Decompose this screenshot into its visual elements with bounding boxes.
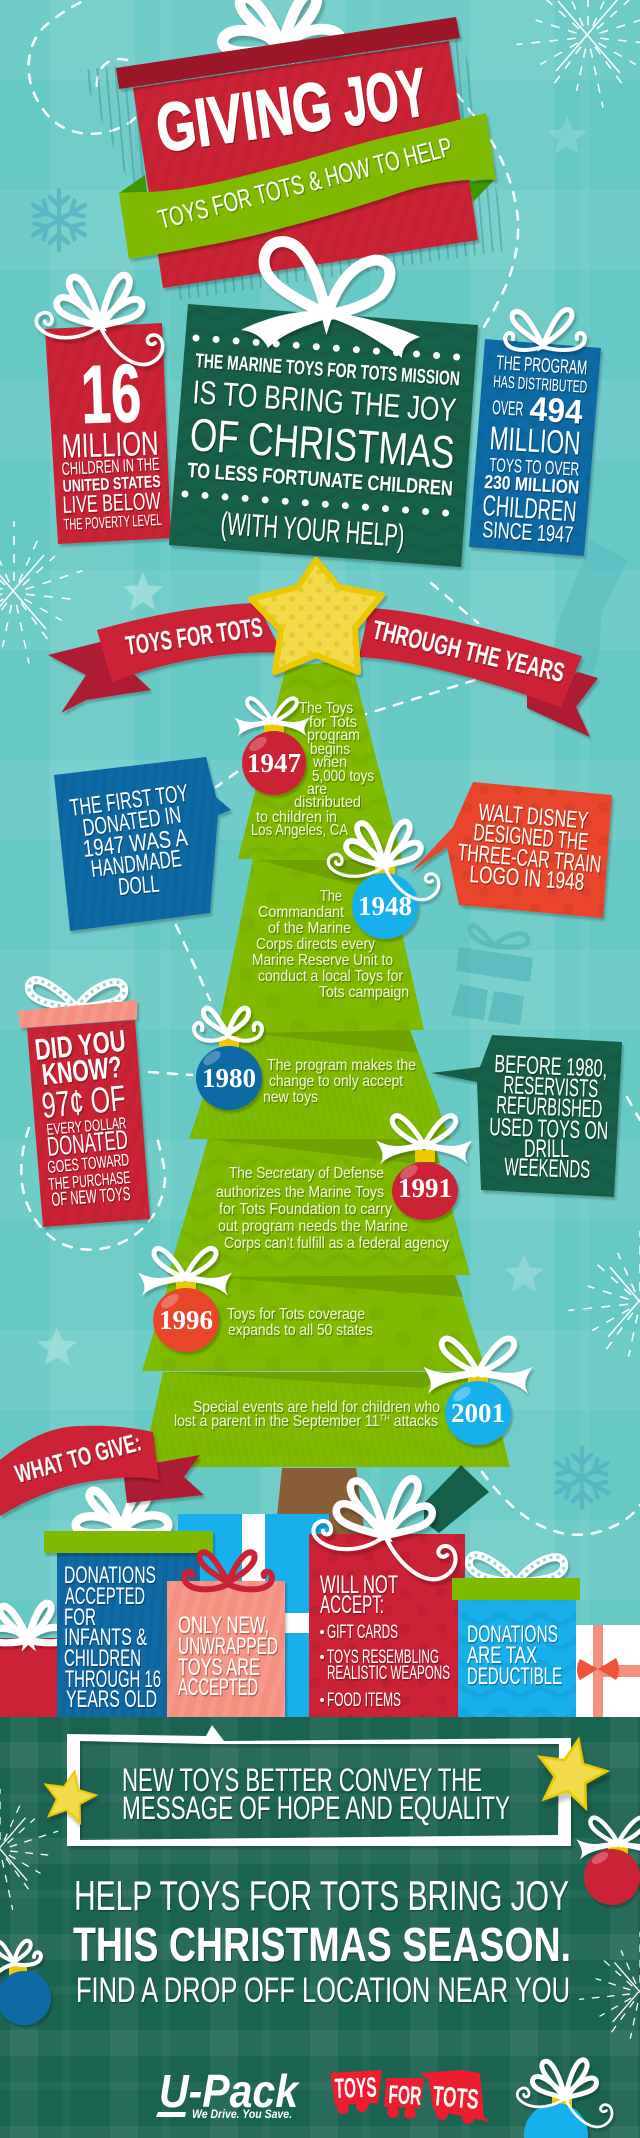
gift: only new unwrapped [167, 1552, 285, 1717]
banner: what to give [0, 1426, 204, 1516]
christmas tree [142, 660, 510, 1535]
curled bow [36, 275, 163, 365]
faint background decorations [0, 0, 640, 1508]
text 1996: expands to all 50 states [228, 1322, 373, 1339]
disney text: LOGO IN 1948 [469, 861, 585, 896]
red tag body [45, 323, 171, 544]
train text [334, 2072, 480, 2115]
text 1991: out program needs the Marine [218, 1218, 408, 1235]
train cars [330, 2070, 490, 2124]
icon: faint gift [451, 926, 533, 1025]
distribution text: CHILDREN [482, 490, 578, 529]
text 1948: conduct a local Toys for [258, 968, 404, 985]
gift: only new unwrapped: ACCEPTED [178, 1674, 258, 1701]
gift lid [116, 17, 460, 89]
year 2001: 2001 [451, 1398, 505, 1428]
icon: gift tag [424, 1465, 489, 1533]
gift: donations accepted: THROUGH 16 [65, 1666, 161, 1693]
text 1991: Corps can't fulfill as a federal agency [224, 1235, 449, 1252]
text 1947: distributed [294, 794, 361, 811]
text 1948: Corps directs every [256, 936, 375, 953]
text 1991: The Secretary of Defense [229, 1165, 384, 1182]
hatched shadow behind title gift [80, 33, 510, 300]
callout: walt disney [410, 782, 612, 918]
green speech panel [431, 1035, 622, 1197]
footer ornament red [576, 1818, 640, 1905]
far left bow [0, 1603, 68, 1643]
timeline 2001 [174, 1338, 533, 1445]
mission body [169, 304, 478, 567]
text 1948: Marine Reserve Unit to [252, 952, 393, 969]
panel: poverty stat red gift [36, 275, 171, 544]
text 1947: are [307, 781, 327, 798]
did you know text: KNOW? [40, 1051, 123, 1092]
text 1947 [251, 700, 374, 839]
distribution text: 494 [528, 390, 584, 432]
text 1948: Commandant [258, 904, 344, 921]
gift: will not accept: GIFT CARDS [327, 1622, 398, 1643]
right banner [359, 608, 582, 707]
text 1947: when [312, 754, 347, 771]
gift: will not accept: REALISTIC WEAPONS [327, 1663, 450, 1684]
text 1947: Los Angeles, CA [251, 822, 348, 839]
reservists text [489, 1050, 609, 1184]
tier 6 [142, 1372, 510, 1467]
footer ornament light blue [517, 2060, 612, 2138]
text 1947: for Tots [309, 714, 357, 731]
ornament 1980 [194, 1008, 262, 1110]
ornament 1947 [235, 698, 309, 795]
distribution text: MILLION [489, 419, 582, 462]
gift pile [0, 1479, 640, 1717]
gift: will not accept: FOOD ITEMS [327, 1690, 401, 1711]
did you know text: GOES TOWARD [47, 1150, 130, 1177]
gift: tax deductible [452, 1555, 580, 1717]
reservists text: DRILL [524, 1135, 569, 1163]
distribution text: SINCE 1947 [482, 516, 574, 548]
callout: reservists [431, 1035, 622, 1197]
gift outlined bow [29, 980, 124, 1008]
did you know text: THE PURCHASE [48, 1168, 131, 1194]
far left red gift [0, 1638, 57, 1717]
did you know text: DONATED [46, 1124, 129, 1162]
icon: right star [531, 1733, 612, 1811]
icon: tree top star [251, 560, 382, 672]
left banner [97, 603, 282, 682]
text 1948: of the Marine [268, 920, 351, 937]
text 1947: 5,000 toys [312, 768, 374, 785]
train text: TOTS [431, 2080, 480, 2115]
text 1947: The Toys [299, 700, 353, 717]
panel: toys distributed blue gift [469, 310, 601, 556]
callout: first toy [54, 757, 231, 931]
text 1996: Toys for Tots coverage [227, 1306, 365, 1323]
ornament 2001 [423, 1338, 533, 1445]
text 1947: begins [310, 741, 350, 758]
text 1980: change to only accept [269, 1073, 403, 1090]
stat caption: CHILDREN IN THE [61, 454, 160, 479]
U-Pack wordmark: U-Pack [159, 2065, 300, 2117]
mission text: IS TO BRING THE JOY [192, 373, 457, 428]
gift: donations accepted: YEARS OLD [66, 1686, 157, 1713]
gift: will not accept: ACCEPT: [320, 1591, 384, 1619]
white frame [67, 1725, 571, 1846]
train text: FOR [388, 2079, 422, 2111]
ornament 1948 [328, 821, 439, 939]
right tail [527, 672, 598, 737]
text 2001: TH [379, 1413, 390, 1423]
text 1948 [252, 888, 409, 1001]
timeline 1947 [235, 698, 374, 839]
first toy text: THE FIRST TOY [68, 780, 190, 822]
tier 3 [189, 1030, 450, 1139]
text 1991 [216, 1165, 449, 1252]
footer call to action [73, 1872, 571, 2010]
first toy text: HANDMADE [89, 845, 183, 883]
dotted row bottom [185, 494, 446, 513]
icon: left star [39, 1766, 100, 1825]
ornament 1996 [138, 1248, 232, 1352]
gift body red [27, 1020, 150, 1227]
text 1980 [263, 1057, 416, 1106]
mission text: THE MARINE TOYS FOR TOTS MISSION [195, 350, 461, 390]
text 1948: The [320, 888, 342, 905]
distribution text: 230 MILLION [484, 472, 580, 499]
train text: TOYS [334, 2072, 377, 2104]
U-Pack tagline: We Drive. You Save. [192, 2107, 292, 2121]
title text: JOY [338, 54, 431, 141]
bow on title gift [222, 0, 342, 52]
text 2001 [174, 1399, 440, 1430]
title gift box [116, 0, 496, 288]
blue speech panel [54, 757, 231, 931]
year 1980: 1980 [202, 1063, 256, 1093]
logo: Toys for Tots train [330, 2070, 490, 2124]
white horizontal ribbon [285, 1613, 309, 1633]
banner: through the years [48, 603, 598, 737]
timeline 1948 [252, 821, 439, 1001]
gift: tax deductible: DEDUCTIBLE [467, 1663, 562, 1690]
footer ornament blue [0, 1941, 51, 2025]
text 1948: Tots campaign [319, 984, 409, 1001]
white gift far right [576, 1625, 640, 1717]
first toy text: DOLL [117, 871, 160, 901]
gift: donations accepted: ACCEPTED [65, 1583, 145, 1610]
ornament 1991 [376, 1116, 472, 1220]
gift: will not accept: TOYS RESEMBLING [327, 1647, 439, 1668]
tier 4 [168, 1139, 470, 1275]
mission text: (WITH YOUR HELP) [220, 505, 406, 554]
year 1991: 1991 [398, 1173, 452, 1203]
tier 2 [218, 859, 424, 1030]
small curled bow [505, 310, 585, 350]
did you know text: 97¢ OF [40, 1077, 127, 1126]
distribution text: OVER [492, 397, 524, 421]
distribution text [482, 352, 588, 548]
distribution text: TOYS TO OVER [489, 455, 580, 481]
large white bow [241, 241, 420, 358]
year 1947: 1947 [247, 748, 301, 778]
banner body [0, 1426, 159, 1516]
year 1996: 1996 [159, 1305, 213, 1335]
gift: donations accepted: FOR [64, 1604, 96, 1631]
disney text: WALT DISNEY [478, 799, 589, 835]
frame text: NEW TOYS BETTER CONVEY THE [122, 1762, 482, 1798]
gift: donations accepted: CHILDREN [64, 1645, 141, 1672]
text 1996 [227, 1306, 373, 1339]
gift: tax deductible: DONATIONS [467, 1621, 558, 1648]
footer fireworks [0, 1789, 640, 2053]
subtitle: TOYS FOR TOTS & HOW TO HELP [155, 132, 455, 235]
gift: donations accepted: DONATIONS [64, 1562, 156, 1589]
stat caption: LIVE BELOW [62, 488, 161, 519]
gift: only new unwrapped: UNWRAPPED [178, 1633, 278, 1660]
first toy text: 1947 WAS A [82, 824, 189, 863]
dotted row top [196, 338, 457, 357]
frame text [122, 1762, 510, 1826]
logo: U-Pack [156, 2065, 300, 2121]
timeline 1980 [194, 1008, 416, 1110]
mission text: TO LESS FORTUNATE CHILDREN [187, 459, 454, 501]
text 2001: attacks [390, 1413, 438, 1430]
gift: only new unwrapped: TOYS ARE [178, 1654, 260, 1681]
background light blue gift [178, 1514, 329, 1717]
text 1947: to children in [256, 809, 337, 826]
U-Pack bar [156, 2112, 186, 2117]
white vertical ribbon [242, 1514, 265, 1614]
text 1980: The program makes the [267, 1057, 416, 1074]
mission text [187, 350, 461, 554]
tier 5 [142, 1275, 486, 1371]
text 2001: lost a parent in the September 11 [174, 1413, 409, 1430]
did you know text [33, 1025, 131, 1211]
panel: mission green gift [169, 241, 478, 567]
first toy text [68, 780, 190, 901]
text 2001: Special events are held for children who [193, 1399, 440, 1416]
title text: GIVING [152, 67, 336, 167]
green ribbon [119, 113, 496, 259]
gift: will not accept [309, 1479, 465, 1717]
did you know text: DID YOU [33, 1025, 127, 1067]
stat caption: THE POVERTY LEVEL [63, 512, 162, 534]
text 1991: for Tots Foundation to carry [219, 1201, 392, 1218]
gift: will not accept: WILL NOT [320, 1571, 398, 1599]
gift: donations accepted [44, 1487, 213, 1717]
year 1948: 1948 [358, 891, 412, 921]
stat caption [61, 425, 162, 534]
callout: did you know [18, 980, 150, 1227]
blue tag body [469, 339, 601, 556]
mission text: OF CHRISTMAS [188, 408, 456, 478]
dashed trails [21, 0, 640, 1535]
disney text [456, 799, 602, 896]
timeline 1991 [216, 1116, 472, 1252]
did you know text: EVERY DOLLAR [46, 1115, 127, 1139]
banner tail [124, 1455, 204, 1503]
gift: donations accepted: INFANTS & [64, 1624, 147, 1651]
stat caption: UNITED STATES [62, 472, 161, 496]
banner label: WHAT TO GIVE: [12, 1428, 144, 1489]
did you know text: OF NEW TOYS [51, 1184, 131, 1211]
footer plaid panel [0, 1717, 640, 2138]
timeline 1996 [138, 1248, 373, 1352]
text 1991: authorizes the Marine Toys [216, 1184, 384, 1201]
first toy text: DONATED IN [81, 801, 183, 842]
text 1947: program [307, 727, 360, 744]
gift: only new unwrapped: ONLY NEW, [178, 1612, 269, 1639]
orange speech panel [410, 782, 612, 918]
green ribbon tails [119, 175, 496, 202]
text 1980: new toys [263, 1089, 318, 1106]
left tail [48, 642, 151, 713]
gift body [133, 41, 478, 288]
tier 1 [238, 660, 402, 859]
stat number: 16 [79, 348, 143, 441]
gift lid salmon [18, 1000, 137, 1028]
callout: message frame [39, 1725, 612, 1846]
gift: tax deductible: ARE TAX [467, 1642, 537, 1669]
tree trunk [275, 1468, 365, 1535]
banner text left: TOYS FOR TOTS [124, 612, 264, 661]
stat caption: MILLION [61, 425, 159, 466]
